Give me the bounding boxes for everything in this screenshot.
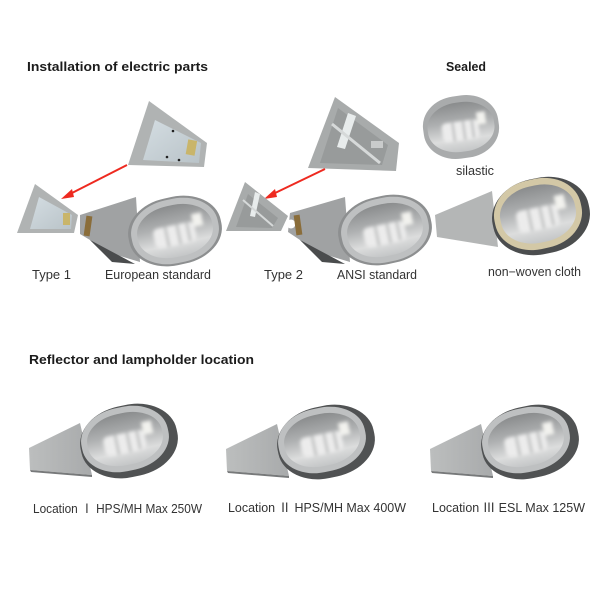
arrow: red arrow type 1 xyxy=(61,165,127,199)
panel: location III xyxy=(430,397,585,515)
label: ansi standard: ANSI standard xyxy=(337,268,417,282)
icon: detached electric tray type 1 xyxy=(128,101,207,167)
heading: sealed: Sealed xyxy=(446,59,486,74)
panel: location I xyxy=(29,396,202,516)
arrow: red arrow type 2 xyxy=(264,169,325,199)
icon: lamp with non-woven cloth seal xyxy=(435,169,597,263)
label: silastic: silastic xyxy=(456,164,494,178)
heading: installation of electric parts: Installation of electric parts xyxy=(27,59,208,74)
panel: location II xyxy=(226,397,406,515)
icon: lamp location III xyxy=(430,397,585,487)
icon: lamp location II xyxy=(226,397,381,487)
label: european standard: European standard xyxy=(105,268,211,282)
panel: type 2 ANSI standard xyxy=(226,97,438,282)
panel: type 1 European standard xyxy=(17,101,228,282)
heading: reflector and lampholder location: Reflector and lampholder location xyxy=(29,352,254,367)
label: location III: Location Ⅲ ESL Max 125W xyxy=(432,501,585,515)
icon: silastic sealed lens xyxy=(419,91,503,163)
label: location I: Location Ⅰ HPS/MH Max 250W xyxy=(33,502,202,516)
icon: open lamp type 2 xyxy=(226,182,438,273)
label: location II: Location Ⅱ HPS/MH Max 400W xyxy=(228,501,406,515)
icon: open lamp type 1 xyxy=(17,184,228,274)
label: non-woven cloth: non−woven cloth xyxy=(488,265,581,279)
label: type 2: Type 2 xyxy=(264,268,303,282)
icon: detached electric tray type 2 xyxy=(308,97,399,171)
panel: sealed options xyxy=(419,91,597,279)
icon: lamp location I xyxy=(29,396,184,486)
label: type 1: Type 1 xyxy=(32,268,71,282)
